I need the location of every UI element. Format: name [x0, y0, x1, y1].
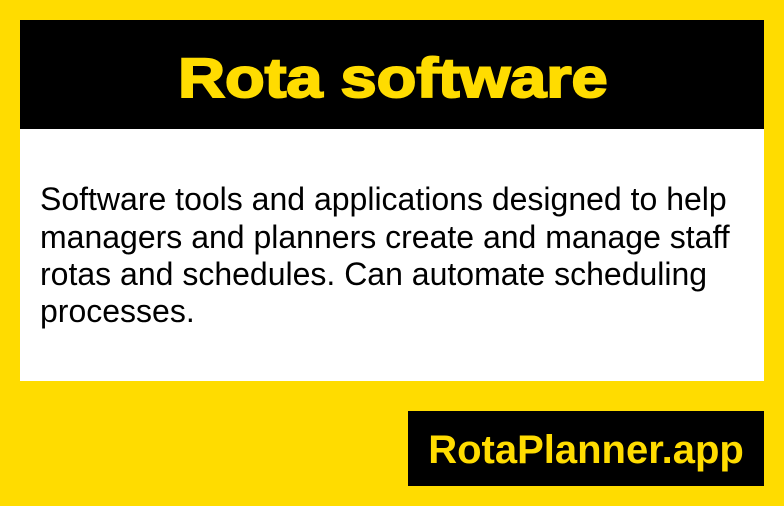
brand badge: RotaPlanner.app: [428, 428, 744, 472]
title: Rota software: [178, 46, 608, 109]
text block: definition: rotas and schedules. Can automate scheduling: [40, 256, 707, 292]
brand badge: [408, 411, 764, 486]
text block: definition: managers and planners create and manage staff: [40, 219, 730, 255]
header band: [20, 20, 764, 129]
text block: definition: Software tools and applications designed to help: [40, 181, 727, 217]
panel: definition: [20, 129, 764, 381]
text block: definition: [40, 181, 730, 329]
text block: definition: processes.: [40, 293, 195, 329]
